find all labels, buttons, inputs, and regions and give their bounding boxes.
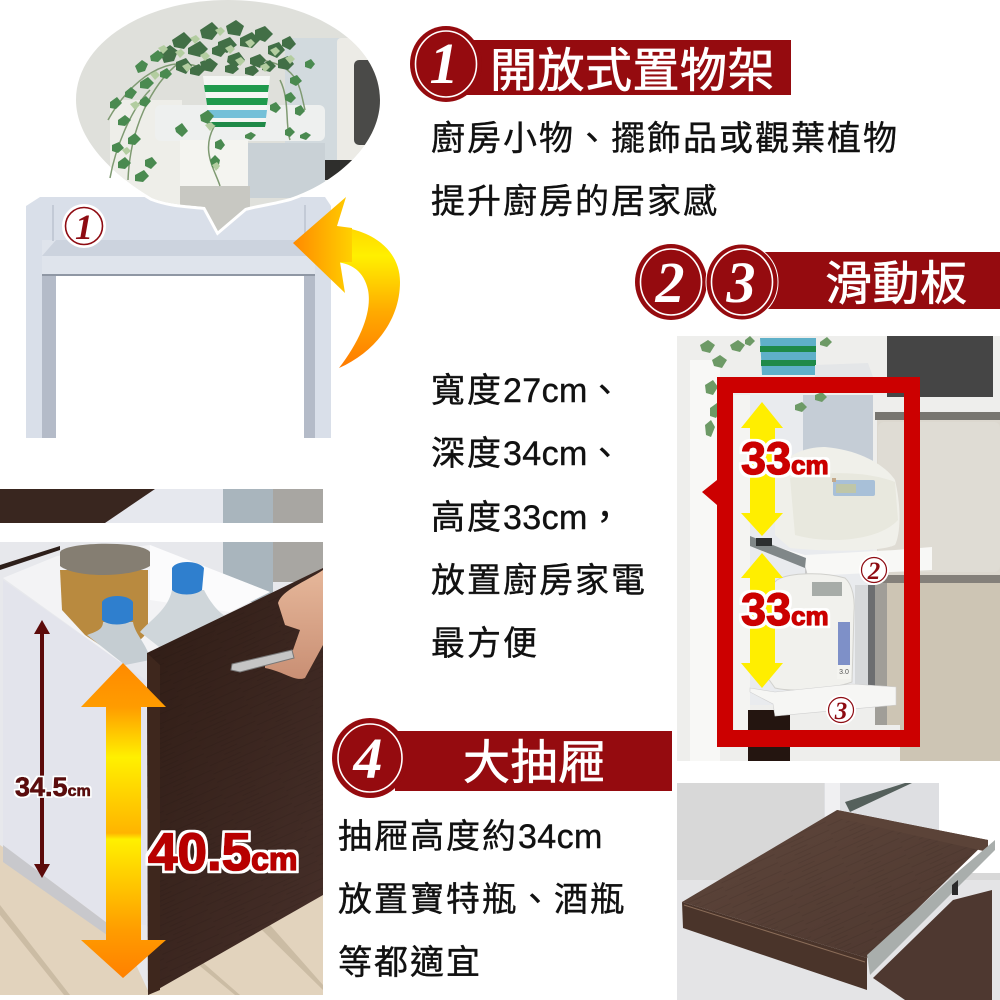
arrow: 34.5cm inner height <box>34 620 50 878</box>
badge: board number 3 <box>826 695 856 725</box>
badge: board number 2: 2 <box>867 558 880 585</box>
floor <box>0 845 323 995</box>
icon: striped plant pot <box>203 76 270 127</box>
heading: sections 2 and 3: 3 <box>726 250 756 315</box>
label: upper 33cm: 33cm <box>741 433 829 484</box>
label: 40.5cm: 40.5cm <box>148 823 297 882</box>
text block: section 1 description: 提升廚房的居家感 <box>431 183 719 221</box>
drawer side panel <box>56 884 106 922</box>
text block: sliding board dimensions: 最方便 <box>431 625 539 663</box>
heading: sections 2 and 3: 2 <box>654 250 684 315</box>
panel: drawer top strip photo <box>0 489 323 523</box>
background fridge <box>875 412 1000 761</box>
shelf interior <box>734 395 900 761</box>
heading: section 1: 1 <box>430 31 458 96</box>
text block: sliding board dimensions: 高度33cm， <box>431 499 624 537</box>
large water bottle <box>140 562 228 650</box>
panel: large drawer photo <box>0 542 323 995</box>
text block: section 1 description <box>431 120 899 221</box>
front metal rail <box>867 840 995 975</box>
heading: section 1 <box>410 26 791 102</box>
heading: section 4: 大抽屜 <box>463 736 606 789</box>
rice cooker <box>790 447 900 549</box>
arrow: 40.5cm drawer height <box>81 663 166 978</box>
drawer inner walls <box>3 545 270 662</box>
text block: sliding board dimensions: 放置廚房家電 <box>431 562 647 600</box>
rails <box>845 783 912 812</box>
background microwave <box>875 336 1000 412</box>
text block: sliding board dimensions <box>431 372 647 663</box>
text block: drawer description: 等都適宜 <box>338 944 482 982</box>
lower board <box>873 890 992 1000</box>
slide board 2 <box>750 536 932 574</box>
icon: curved orange arrow <box>293 197 400 368</box>
arrow: upper 33cm dimension <box>741 402 783 536</box>
plant and pot at top <box>700 336 873 437</box>
text block: sliding board dimensions: 寬度27cm、 <box>431 372 624 410</box>
panel: open shelf illustration <box>26 0 390 438</box>
text block: sliding board dimensions: 深度34cm、 <box>431 435 624 473</box>
photo bubble: plant on shelf <box>70 0 390 240</box>
label: 34.5cm: 34.5cm <box>15 772 91 802</box>
small water bottle <box>87 596 150 665</box>
panel: sliding boards photo <box>677 336 1000 761</box>
text block: drawer description: 放置寶特瓶、酒瓶 <box>338 881 626 919</box>
red highlight frame <box>702 377 920 747</box>
storage jar <box>60 544 150 646</box>
label: lower 33cm: 33cm <box>741 584 829 635</box>
heading: section 4 <box>332 718 672 798</box>
badge: board number 2 <box>859 555 889 585</box>
text block: drawer description: 抽屜高度約34cm <box>338 818 603 856</box>
heading: sections 2 and 3: 滑動板 <box>825 257 968 310</box>
heading: sections 2 and 3 <box>635 244 1000 320</box>
arrow: lower 33cm dimension <box>741 553 783 688</box>
wooden tray <box>682 810 988 990</box>
slide board 3 <box>750 684 896 716</box>
icon: trailing ivy <box>108 20 315 186</box>
heading: section 1: 開放式置物架 <box>490 44 775 97</box>
heading: section 4: 4 <box>352 726 382 791</box>
panel: sliding board detail photo <box>677 783 1000 1000</box>
thermal pot: 3.0 <box>839 669 849 676</box>
shelf frame <box>26 197 331 438</box>
badge: board number 3: 3 <box>834 698 847 725</box>
drawer front panel <box>147 568 323 995</box>
badge: shelf number 1 <box>62 204 106 248</box>
text block: section 1 description: 廚房小物、擺飾品或觀葉植物 <box>431 120 899 158</box>
text block: drawer description <box>338 818 626 982</box>
hand pulling handle <box>231 570 323 679</box>
thermal pot <box>769 573 855 690</box>
badge: shelf number 1: 1 <box>75 207 93 247</box>
